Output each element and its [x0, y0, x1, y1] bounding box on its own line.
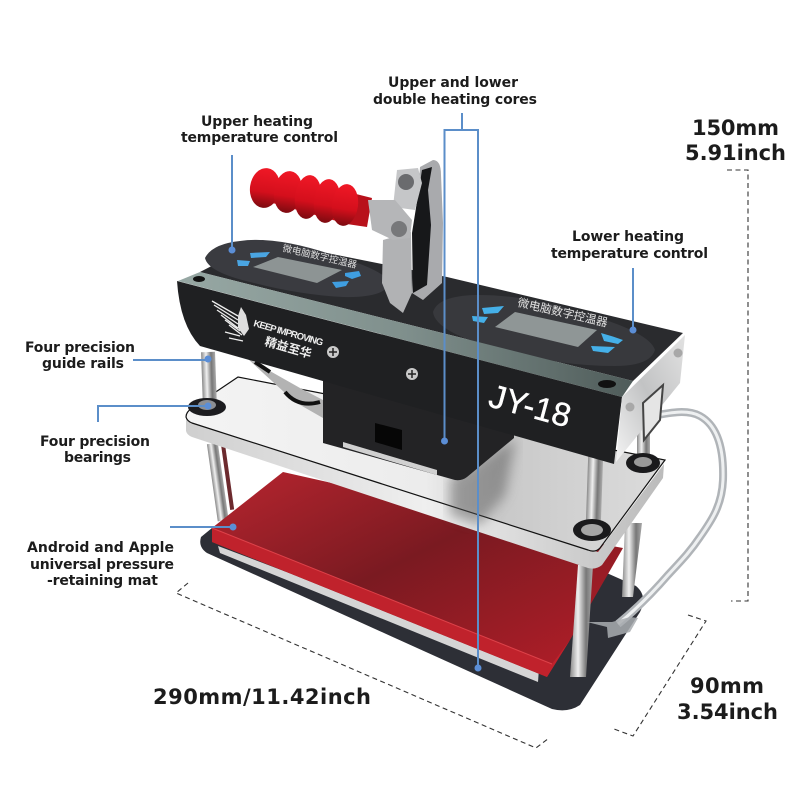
- height dimension label: [685, 116, 786, 165]
- clamp mechanism: [368, 160, 443, 313]
- right temperature display: [433, 294, 655, 366]
- height dimension line: [727, 170, 748, 601]
- head front panel: [177, 272, 685, 464]
- label: double heating cores: Upper and lower: [388, 75, 518, 91]
- label: pressure-retaining mat: universal pressure: [30, 557, 174, 573]
- head top surface: [200, 240, 683, 381]
- cable and spiral hose: [587, 412, 723, 638]
- label: four precision guide rails: guide rails: [42, 356, 124, 372]
- callout: mat: [170, 524, 236, 530]
- callout: bearings: [98, 402, 212, 422]
- length dimension label: 290mm/11.42inch: [153, 685, 371, 709]
- back guide rails: [207, 443, 642, 597]
- label: double heating cores: double heating cores: [373, 92, 537, 108]
- base plate: [200, 528, 643, 710]
- height dimension label: 5.91inch: [685, 141, 786, 165]
- middle steel plate: [186, 377, 665, 569]
- callout: double heating cores: [441, 113, 482, 672]
- label: pressure-retaining mat: -retaining mat: [47, 573, 158, 589]
- callout: lower heating: [630, 268, 636, 334]
- pressure-retaining mat: [212, 472, 623, 682]
- tubes under head: [247, 358, 323, 418]
- label: double heating cores: [373, 75, 537, 108]
- red handle: [247, 166, 372, 228]
- right temperature display: 微电脑数字控温器: [516, 294, 610, 331]
- label: upper heating temperature control: temperature control: [181, 130, 338, 146]
- logo text: 精益至华: [263, 333, 314, 362]
- label: lower heating temperature control: [551, 229, 708, 262]
- depth dimension label: [677, 674, 778, 724]
- eagle logo: [212, 301, 249, 341]
- depth dimension line: [614, 615, 706, 736]
- logo text: [252, 318, 324, 362]
- logo text: KEEP IMPROVING: [252, 318, 324, 349]
- length dimension line: [176, 583, 549, 748]
- height dimension label: 150mm: [692, 116, 779, 140]
- model number: JY-18: [485, 377, 575, 434]
- left temperature display: [205, 240, 390, 297]
- guide rails above plate: [201, 352, 650, 529]
- front right guide rail: [570, 565, 593, 677]
- label: upper heating temperature control: [181, 114, 338, 146]
- depth dimension label: 3.54inch: [677, 700, 778, 724]
- label: four precision bearings: Four precision: [40, 434, 150, 450]
- label: lower heating temperature control: Lower heating: [572, 229, 684, 245]
- label: four precision guide rails: [25, 340, 135, 372]
- depth dimension label: 90mm: [690, 674, 764, 698]
- label: pressure-retaining mat: [27, 540, 174, 589]
- callout: guide rails: [133, 356, 212, 362]
- product photo: press machine: [177, 160, 723, 710]
- label: pressure-retaining mat: Android and Apple: [27, 540, 174, 556]
- label: upper heating temperature control: Upper heating: [201, 114, 313, 130]
- callout: upper heating: [228, 155, 236, 254]
- left temperature display: 微电脑数字控温器: [281, 240, 359, 271]
- bearings: [188, 398, 660, 541]
- label: four precision bearings: bearings: [64, 450, 131, 466]
- label: four precision bearings: [40, 434, 150, 466]
- label: four precision guide rails: Four precision: [25, 340, 135, 356]
- label: lower heating temperature control: temperature control: [551, 246, 708, 262]
- heating core box: [323, 378, 514, 480]
